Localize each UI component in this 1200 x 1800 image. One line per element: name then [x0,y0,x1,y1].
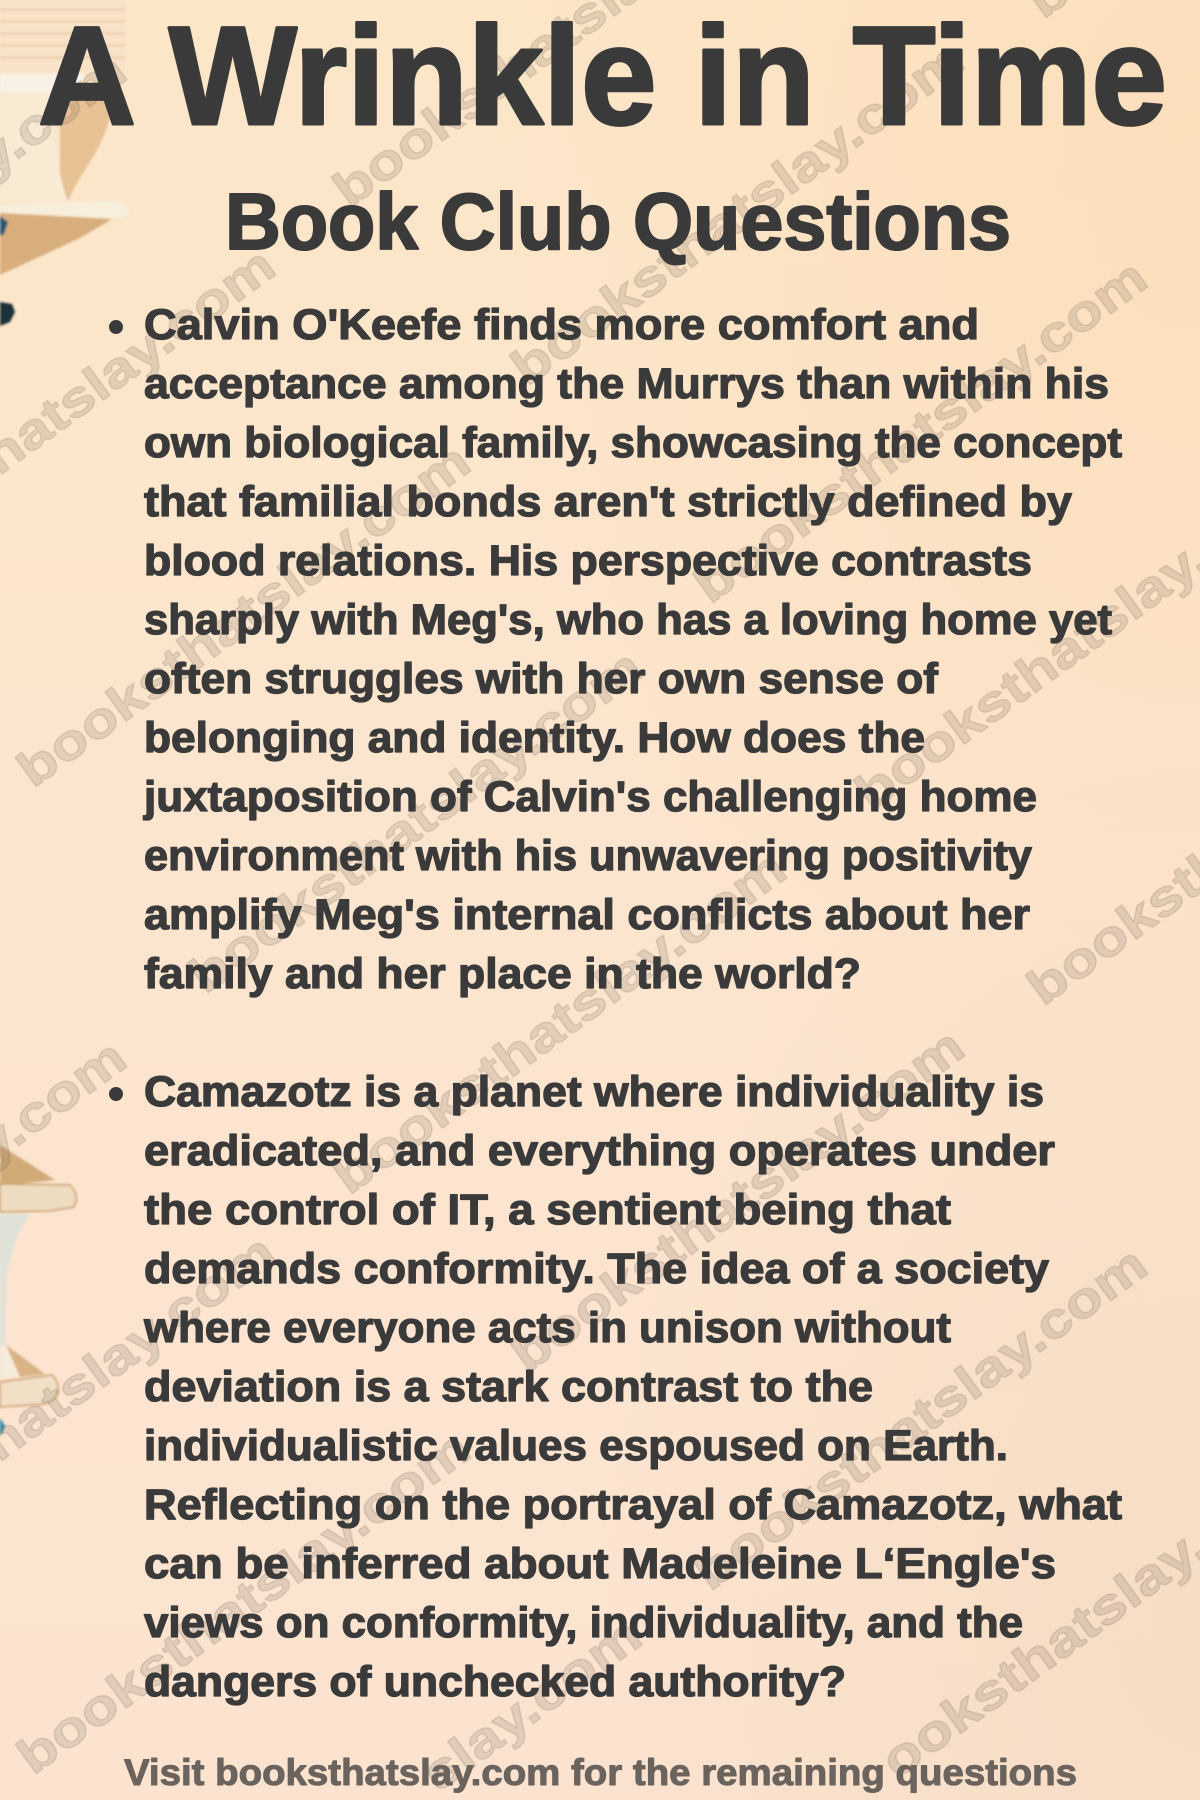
question 2: where everyone acts in unison without [143,1304,951,1352]
subtitle: Book Club Questions [225,177,1011,266]
watermarks: booksthatslay.com [7,432,480,798]
question 1: sharply with Meg's, who has a loving home yet [144,596,1112,644]
question 2: eradicated, and everything operates under [144,1127,1055,1175]
question 1: family and her place in the world? [144,950,861,998]
watermarks: booksthatslay.com [501,30,974,396]
question 1: often struggles with her own sense of [144,655,939,703]
illustration: lower book stack [0,1145,76,1434]
question 2: Reflecting on the portrayal of Camazotz, what [144,1481,1122,1529]
watermarks: slay.com [412,1606,652,1800]
question 2: views on conformity, individuality, and the [144,1599,1023,1647]
question 2: individualistic values espoused on Earth. [144,1422,1008,1470]
question 2 [109,1068,1122,1706]
watermarks: booksthatslay.com [7,1419,480,1785]
question 2: demands conformity. The idea of a society [144,1245,1049,1293]
question 1: Calvin O'Keefe finds more comfort and [144,301,979,349]
question 1: that familial bonds aren't strictly defined by [144,478,1072,526]
illustration: top book stack [0,0,129,326]
watermarks: booksthatslay.com [323,839,796,1205]
question 1: acceptance among the Murrys than within his [144,360,1109,408]
question 2: deviation is a stark contrast to the [144,1363,873,1411]
question 2: the control of IT, a sentient being that [144,1186,951,1234]
question 2: can be inferred about Madeleine L‘Engle's [144,1540,1056,1588]
footer call to action: Visit booksthatslay.com for the remaining questions [124,1752,1077,1793]
watermarks: booksthatslay.com [684,1235,1157,1601]
question 1: environment with his unwavering positivity [144,832,1032,880]
question 1: juxtaposition of Calvin's challenging home [143,773,1037,821]
watermarks: booksthatslay.com [501,1017,974,1383]
question 1: belonging and identity. How does the [144,714,925,762]
watermarks: booksthatslay.com [684,248,1157,614]
question 2: Camazotz is a planet where individuality is [144,1068,1044,1116]
question 1: amplify Meg's internal conflicts about her [144,891,1030,939]
question 2: dangers of unchecked authority? [144,1658,846,1706]
question 1: blood relations. His perspective contrasts [144,537,1032,585]
title: A Wrinkle in Time [38,0,1167,154]
question 1 [109,301,1122,998]
question 1: own biological family, showcasing the concept [144,419,1122,467]
watermarks: booksthatslay.com [179,638,652,1004]
